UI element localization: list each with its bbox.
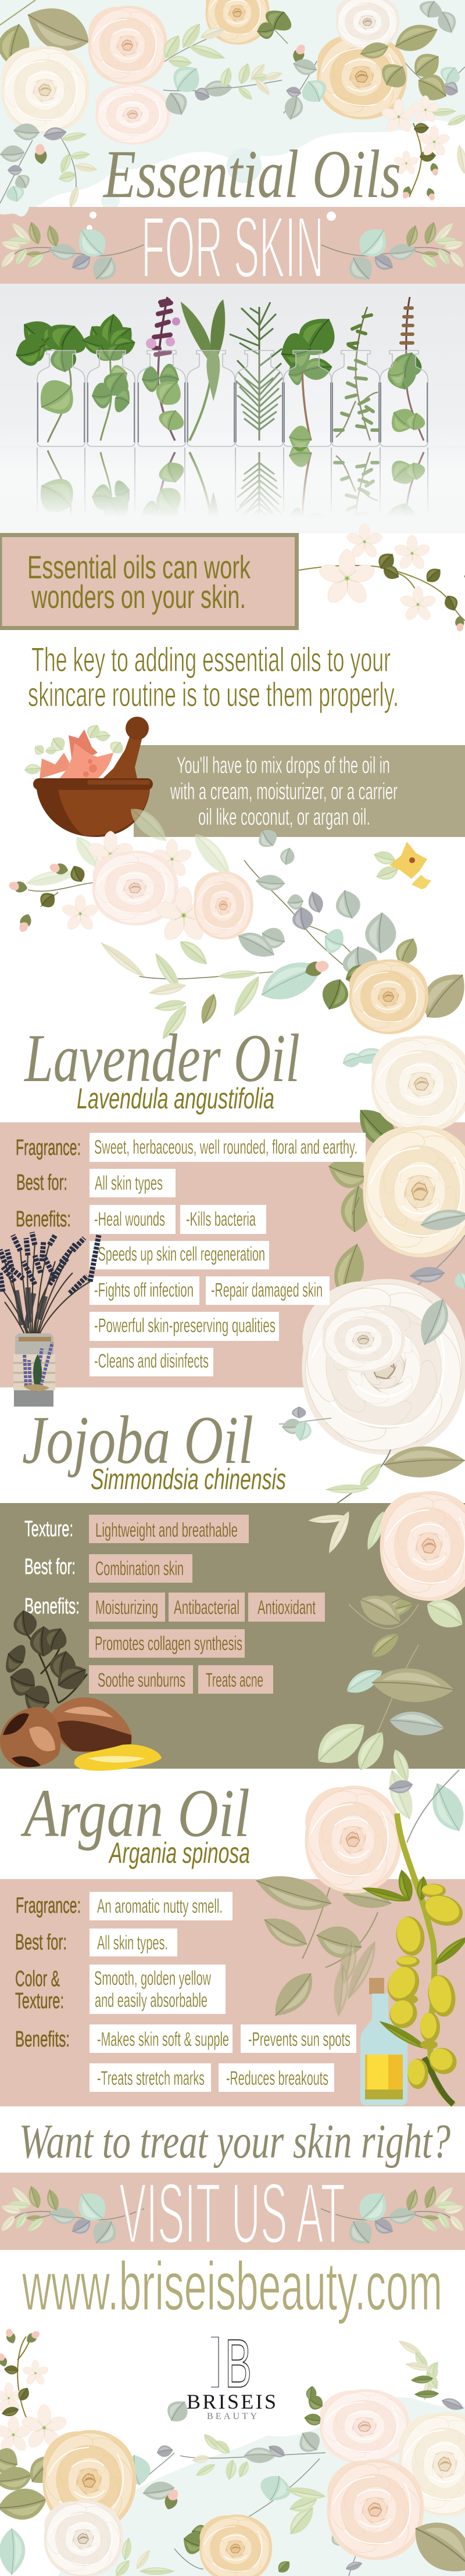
argan row: color and texture: Color & xyxy=(15,1967,60,1991)
floral column: lavender section xyxy=(279,1029,465,1511)
rose: cream far right xyxy=(389,2405,465,2523)
argan row: fragrance: An aromatic nutty smell. xyxy=(97,1895,223,1917)
big olive leaf xyxy=(19,0,96,61)
jojoba row: texture: Texture: xyxy=(24,1517,73,1541)
jojoba row: best for: Best for: xyxy=(24,1555,76,1579)
section heading: argan oil: Argania spinosa xyxy=(108,1837,250,1869)
illustration: jojoba plant and nuts xyxy=(0,1608,162,1771)
callout box: essential oils can work wonders: wonders on your skin. xyxy=(31,578,246,615)
argan row: benefits xyxy=(15,2024,356,2092)
bud: pale pink xyxy=(303,957,331,979)
jojoba row: benefits: Benefits: xyxy=(24,1594,80,1619)
foliage sprigs xyxy=(0,0,465,209)
rose: pale left xyxy=(37,2495,130,2576)
rose: peach xyxy=(296,1778,410,1900)
argan row: benefits: Benefits: xyxy=(15,2027,70,2052)
rose: cream top xyxy=(362,1029,465,1138)
lavender row: fragrance xyxy=(16,1133,366,1162)
sprig: right xyxy=(321,220,465,287)
section heading: jojoba oil: Simmondsia chinensis xyxy=(91,1463,286,1495)
leaves: pale green branch xyxy=(97,936,264,1043)
blossom branch: right of callout xyxy=(299,523,465,632)
section heading: lavender oil: Lavendula angustifolia xyxy=(77,1082,274,1115)
lavender row: benefits: Benefits: xyxy=(16,1207,71,1232)
argan row: fragrance xyxy=(16,1892,233,1920)
leaves xyxy=(0,2338,465,2576)
buds xyxy=(8,862,87,933)
argan row: benefits: -Makes skin soft & supple xyxy=(97,2028,229,2051)
section heading: lavender oil xyxy=(23,1020,300,1115)
lavender row: benefits xyxy=(16,1205,330,1376)
rose: gold centre xyxy=(192,2510,278,2576)
logo: Briseis Beauty xyxy=(187,2325,276,2421)
floral cluster: argan section xyxy=(252,1767,465,2024)
rose: gold top centre xyxy=(199,0,275,49)
icon: mortar and pestle xyxy=(24,717,153,837)
leaves: mint and olive xyxy=(255,934,465,1028)
lavender row: fragrance: Fragrance: xyxy=(16,1136,81,1160)
jojoba row: benefits: Moisturizing xyxy=(95,1597,158,1619)
rose: pale top right xyxy=(330,0,405,53)
logo: Briseis Beauty: BRISEIS xyxy=(187,2390,276,2413)
sprig: left xyxy=(0,2184,144,2251)
reflection xyxy=(37,446,428,514)
rose: pink right xyxy=(312,2384,417,2468)
blossom branch xyxy=(380,95,451,202)
jojoba row: benefits: Antioxidant xyxy=(257,1597,316,1619)
rose: gold-cream xyxy=(352,1116,465,1265)
bottles xyxy=(37,350,428,446)
jojoba row: benefits: Soothe sunburns xyxy=(98,1669,185,1691)
lavender row: benefits: -Repair damaged skin xyxy=(211,1279,323,1301)
sprig: left xyxy=(0,220,144,287)
illustration: argan oil bottle and olives xyxy=(360,1813,465,2105)
rose: peach right xyxy=(318,2452,432,2567)
banner: visit us at xyxy=(0,2166,465,2262)
argan row: color and texture: Texture: xyxy=(15,1989,64,2013)
argan row: color and texture: and easily absorbable xyxy=(95,1990,208,2012)
yellow flowers xyxy=(372,842,431,889)
lavender row: best for: Best for: xyxy=(16,1171,67,1195)
jojoba row: best for: Combination skin xyxy=(95,1558,184,1580)
blossoms xyxy=(60,831,193,932)
argan row: benefits: -Treats stretch marks xyxy=(97,2067,205,2090)
argan row: benefits: -Prevents sun spots xyxy=(248,2028,350,2051)
header art: top wash, roses and foliage xyxy=(0,0,465,210)
band: mixing instructions xyxy=(134,745,465,837)
jojoba row: best for xyxy=(24,1554,192,1583)
rose: gold xyxy=(342,954,435,1039)
jojoba row: benefits xyxy=(24,1593,325,1694)
rose: peach xyxy=(188,867,258,944)
lavender row: benefits: -Speeds up skin cell regeneration xyxy=(94,1243,265,1265)
floral cluster: middle xyxy=(8,802,465,1043)
section heading: lavender oil: Lavender Oil xyxy=(23,1020,300,1096)
rose: peach xyxy=(371,1483,465,1608)
rose: pink lower xyxy=(88,80,177,148)
rose: large white xyxy=(287,1266,465,1466)
panel: lavender oil xyxy=(0,1122,465,1387)
herbs xyxy=(13,297,427,452)
illustration: lavender bouquet in jar xyxy=(0,1232,99,1407)
argan row: best for: All skin types. xyxy=(97,1932,168,1954)
rose: cream left xyxy=(0,40,96,139)
callout box: essential oils can work wonders xyxy=(0,535,296,628)
jojoba row: benefits: Treats acne xyxy=(206,1669,263,1691)
pale translucent leaves xyxy=(25,802,238,889)
panel: argan oil xyxy=(0,1879,465,2106)
lavender row: benefits: -Heal wounds xyxy=(94,1208,165,1230)
section heading: jojoba oil: Jojoba Oil xyxy=(22,1402,253,1478)
text: key to adding essential oils xyxy=(28,641,399,714)
logo: Briseis Beauty: B xyxy=(225,2325,252,2402)
banner: For Skin xyxy=(0,198,465,296)
section heading: argan oil: Argan Oil xyxy=(20,1775,250,1851)
rose: peach top xyxy=(81,0,174,90)
rose: gold right xyxy=(309,28,414,125)
lavender row: best for: All skin types xyxy=(95,1172,163,1194)
rose: gold left xyxy=(34,2423,144,2538)
footer art: wash, roses and foliage xyxy=(0,2327,465,2576)
section heading: argan oil xyxy=(20,1775,250,1869)
argan row: best for xyxy=(15,1929,177,1956)
lavender row: benefits: -Cleans and disinfects xyxy=(94,1350,209,1372)
large tan leaf xyxy=(404,2510,465,2576)
logo: Briseis Beauty: BEAUTY xyxy=(207,2412,257,2421)
blossoms and buds xyxy=(0,2327,69,2453)
argan row: color and texture: Smooth, golden yellow xyxy=(94,1967,211,1990)
lavender row: benefits: -Powerful skin-preserving qualities xyxy=(94,1315,276,1337)
rose: pale xyxy=(84,845,185,930)
argan row: benefits: -Reduces breakouts xyxy=(226,2067,328,2090)
panel: jojoba oil xyxy=(0,1503,465,1769)
lavender row: best for xyxy=(16,1169,176,1197)
argan row: fragrance: Fragrance: xyxy=(16,1894,81,1918)
sprig: right xyxy=(321,2184,465,2251)
floral column: jojoba section xyxy=(308,1483,465,1784)
argan row: color and texture xyxy=(15,1965,226,2014)
jojoba row: texture xyxy=(24,1515,249,1543)
leaves: sage xyxy=(234,825,397,979)
photo: herbs in glass bottles xyxy=(0,284,465,534)
jojoba row: texture: Lightweight and breathable xyxy=(95,1519,238,1541)
jojoba row: benefits: Promotes collagen synthesis xyxy=(95,1633,242,1655)
lavender row: benefits: -Kills bacteria xyxy=(186,1208,256,1230)
argan row: best for: Best for: xyxy=(15,1930,67,1955)
jojoba row: benefits: Antibacterial xyxy=(174,1597,239,1619)
lavender row: benefits: -Fights off infection xyxy=(94,1279,194,1301)
callout box: essential oils can work wonders: Essential oils can work xyxy=(27,549,251,585)
